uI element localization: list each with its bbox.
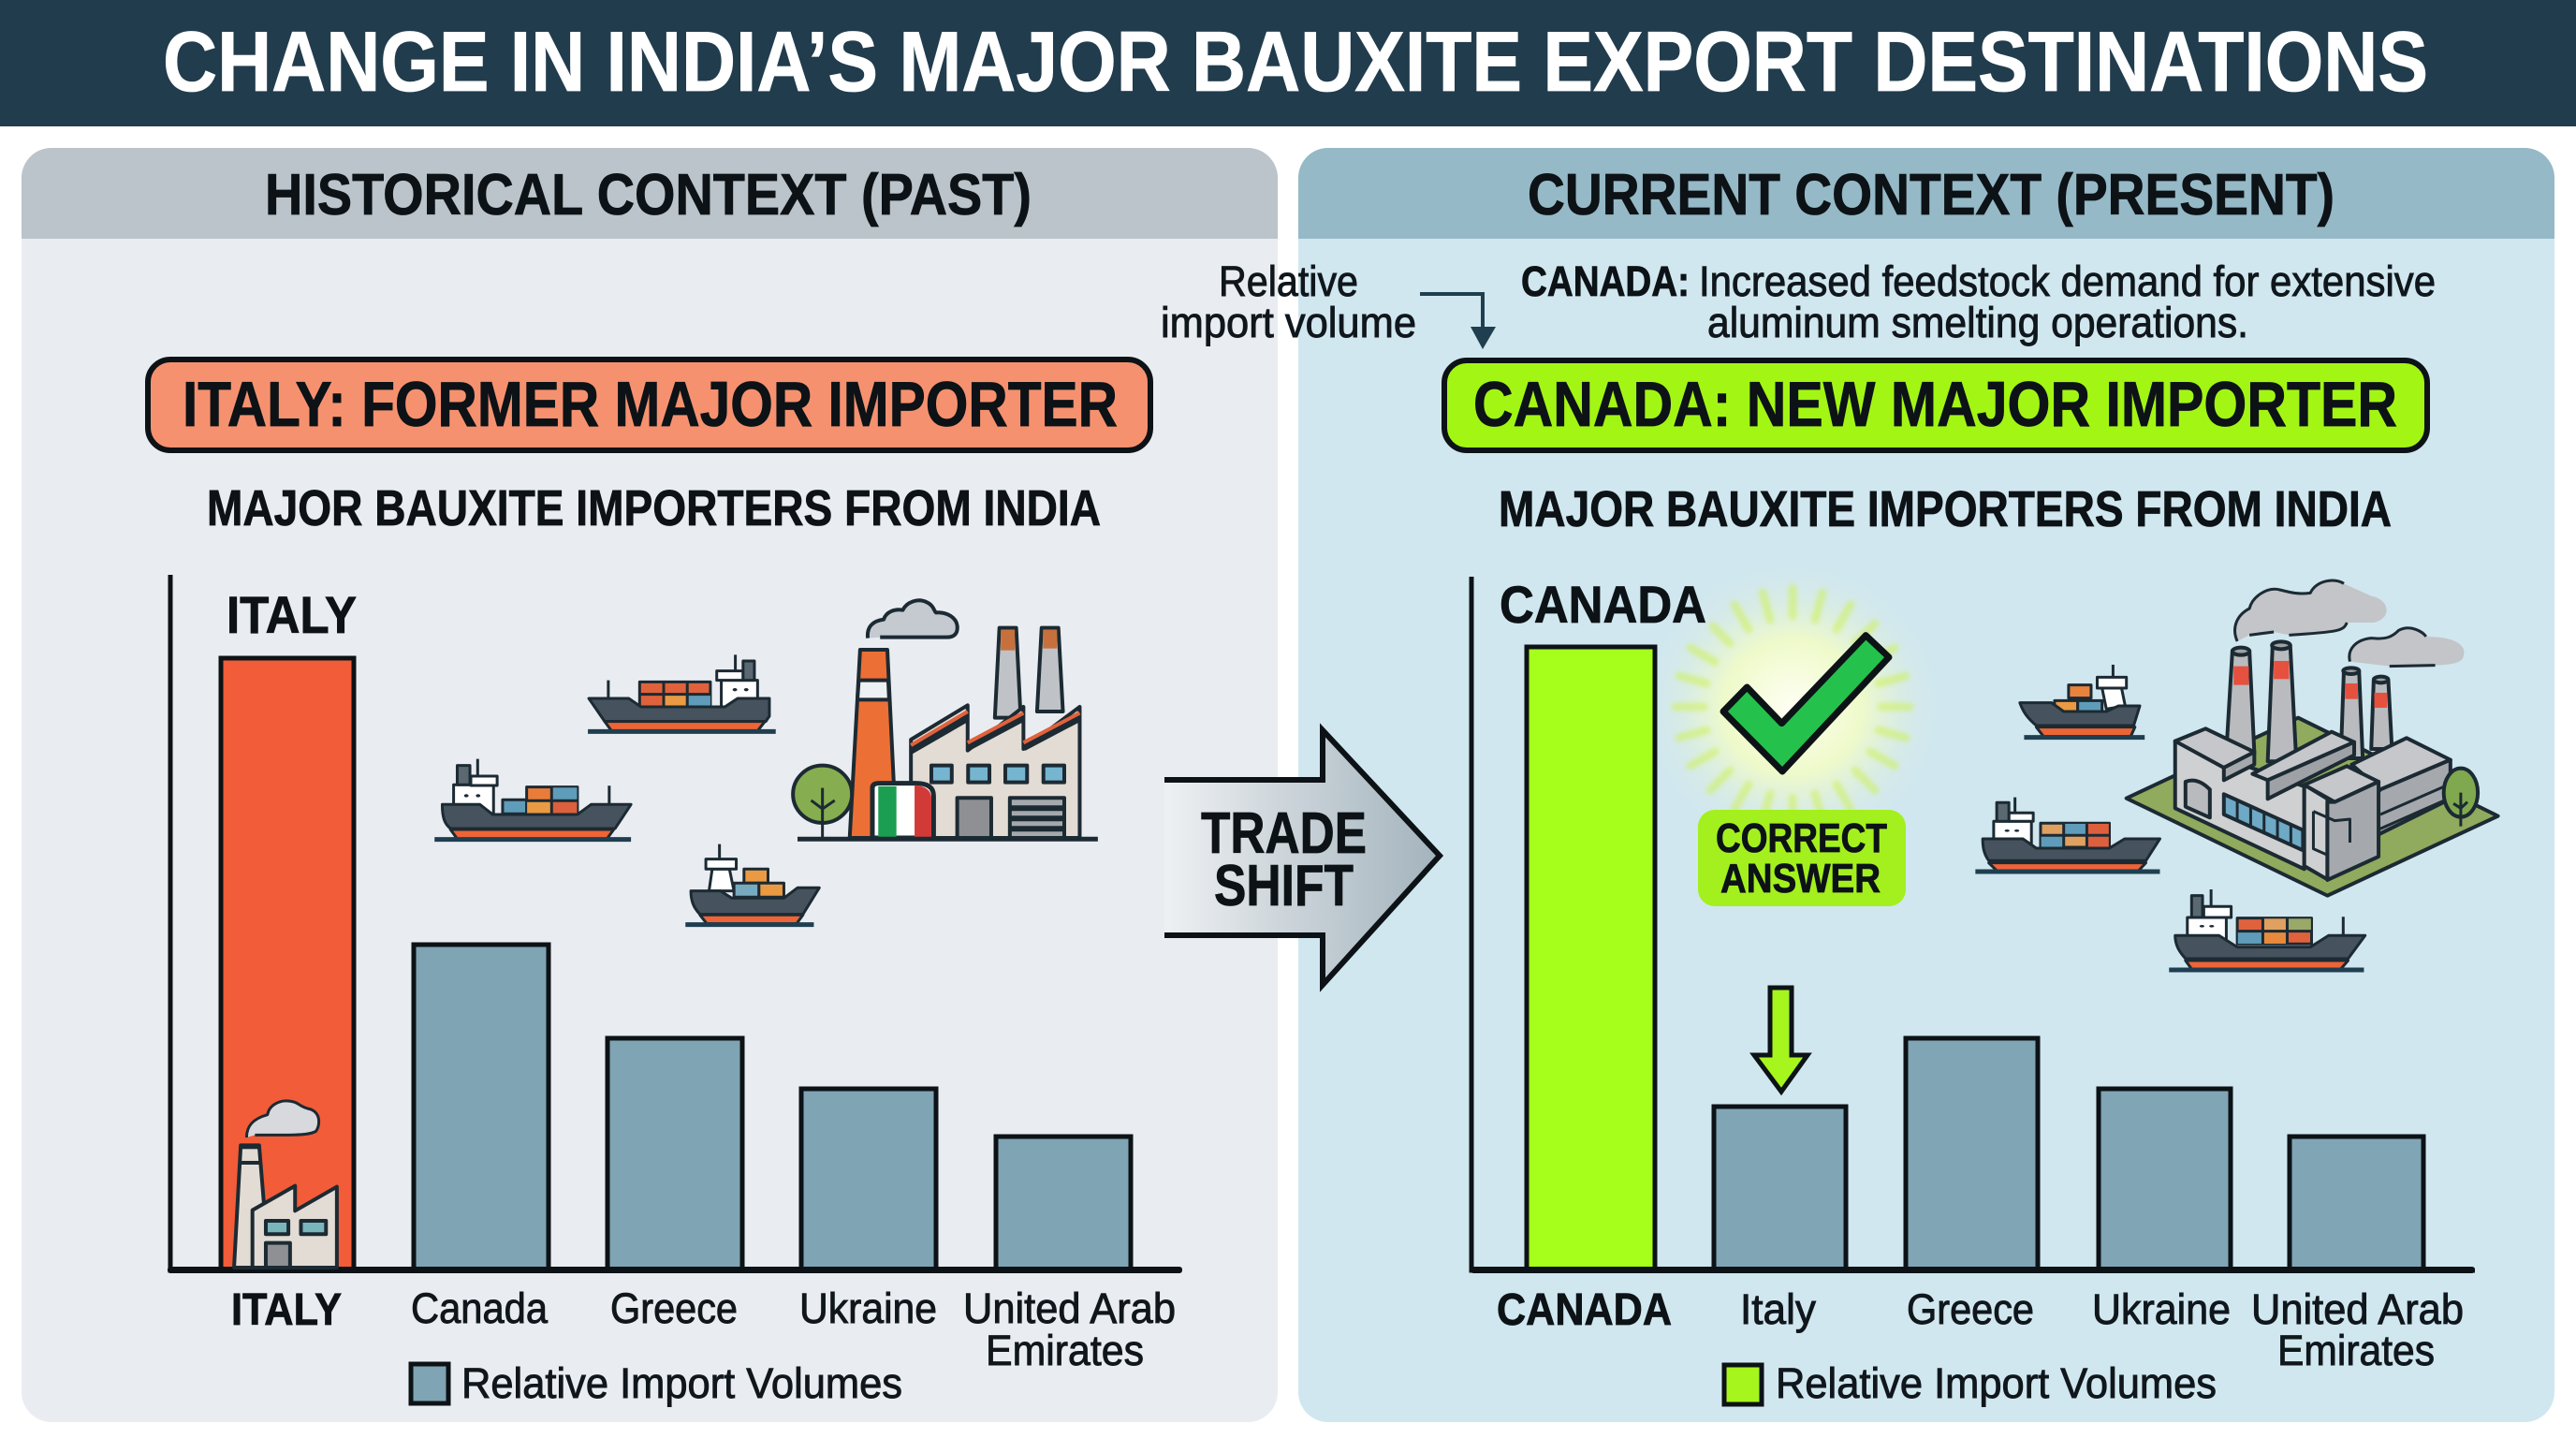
panel: current context (present) bbox=[1298, 148, 2554, 1422]
label: relative import volume: Relative bbox=[1219, 257, 1358, 305]
chart heading: left: MAJOR BAUXITE IMPORTERS FROM INDIA bbox=[207, 480, 1101, 536]
label: relative import volume: import volume bbox=[1161, 299, 1416, 346]
arrow: relative import volume pointer bbox=[1420, 294, 1496, 349]
panel: historical context (past) bbox=[22, 148, 1278, 1422]
chart heading: right: MAJOR BAUXITE IMPORTERS FROM INDIA bbox=[1499, 481, 2392, 537]
icon: isometric smelter bbox=[2127, 580, 2498, 896]
icon: cargo ship top bbox=[2020, 665, 2144, 738]
icon: glowing check mark bbox=[1638, 557, 1947, 857]
callout: Italy former major importer bbox=[148, 360, 1150, 450]
text block: Canada explanation: Increased feedstock demand for extensive bbox=[1699, 257, 2436, 305]
text block: Canada explanation: CANADA: bbox=[1521, 257, 1690, 305]
panel header: historical context: HISTORICAL CONTEXT (PAST) bbox=[265, 163, 1032, 227]
callout: Canada new major importer: CANADA: NEW MAJOR IMPORTER bbox=[1473, 369, 2397, 440]
legend: left: Relative Import Volumes bbox=[461, 1359, 902, 1407]
bar: Italy bbox=[221, 658, 354, 1270]
icon: small factory inside Italy bar bbox=[234, 1101, 337, 1268]
panel header: historical context bbox=[22, 148, 1278, 239]
icon: factory with Italian flag bbox=[793, 600, 1098, 839]
bar chart: past importers bbox=[168, 575, 1182, 1374]
legend: right: Relative Import Volumes bbox=[1776, 1359, 2217, 1407]
axis label: United Arab Emirates: United Arab bbox=[963, 1284, 1176, 1332]
axis label: Ukraine: Ukraine bbox=[799, 1284, 937, 1332]
value label: CANADA on bar: CANADA bbox=[1500, 575, 1706, 634]
icon: cargo ship middle bbox=[1975, 798, 2159, 872]
bar: Canada bbox=[1527, 647, 1655, 1270]
callout: Italy former major importer: ITALY: FORMER MAJOR IMPORTER bbox=[183, 369, 1118, 440]
axis label: United Arab Emirates: Emirates bbox=[2277, 1327, 2435, 1374]
icon: Canadian smelter and cargo ships bbox=[1975, 580, 2498, 970]
bar: Ukraine bbox=[2099, 1089, 2231, 1270]
arrow: trade shift bbox=[1164, 730, 1440, 985]
bar: Greece bbox=[607, 1038, 742, 1270]
axis label: United Arab Emirates: Emirates bbox=[986, 1327, 1144, 1374]
bar: Ukraine bbox=[801, 1089, 936, 1270]
badge: correct answer: ANSWER bbox=[1720, 856, 1881, 902]
arrow: trade shift: SHIFT bbox=[1214, 854, 1354, 918]
axis label: United Arab Emirates: United Arab bbox=[2251, 1285, 2464, 1333]
icon: cargo ship bottom bbox=[685, 844, 819, 925]
arrow: down to Italy bar bbox=[1754, 988, 1808, 1092]
text block: Canada explanation bbox=[1521, 257, 2436, 346]
icon: cargo ship left bbox=[434, 759, 631, 840]
bar: Greece bbox=[1906, 1038, 2038, 1270]
arrow: trade shift: TRADE bbox=[1201, 801, 1367, 866]
axis label: Canada: Canada bbox=[411, 1284, 549, 1332]
bar: Canada bbox=[414, 945, 549, 1270]
icon: cargo ship upper bbox=[588, 654, 776, 731]
axis label: Italy: Italy bbox=[1740, 1285, 1816, 1333]
value label: ITALY on bar: ITALY bbox=[227, 585, 357, 644]
text block: Canada explanation: aluminum smelting operations. bbox=[1707, 299, 2248, 346]
icon: Italian factory and cargo ships bbox=[434, 600, 1098, 925]
panel header: current context bbox=[1298, 148, 2554, 239]
axis label: Greece: Greece bbox=[610, 1284, 738, 1332]
axis label: United Arab Emirates bbox=[2251, 1285, 2464, 1374]
badge: correct answer bbox=[1698, 810, 1906, 906]
axis label: Greece: Greece bbox=[1907, 1285, 2034, 1333]
bar: Italy bbox=[1714, 1107, 1846, 1270]
badge: correct answer: CORRECT bbox=[1716, 815, 1887, 861]
axis label: Ukraine: Ukraine bbox=[2092, 1285, 2231, 1333]
axis label: United Arab Emirates bbox=[963, 1284, 1176, 1374]
bar: United Arab Emirates bbox=[2290, 1137, 2423, 1270]
axis label: ITALY: ITALY bbox=[231, 1285, 342, 1335]
icon: cargo ship lower bbox=[2169, 889, 2365, 970]
panel header: current context: CURRENT CONTEXT (PRESENT) bbox=[1528, 163, 2334, 227]
bar chart: present importers bbox=[1471, 575, 2475, 1374]
axis label: CANADA: CANADA bbox=[1497, 1285, 1672, 1335]
label: relative import volume bbox=[1161, 257, 1416, 346]
bar: United Arab Emirates bbox=[996, 1137, 1131, 1270]
